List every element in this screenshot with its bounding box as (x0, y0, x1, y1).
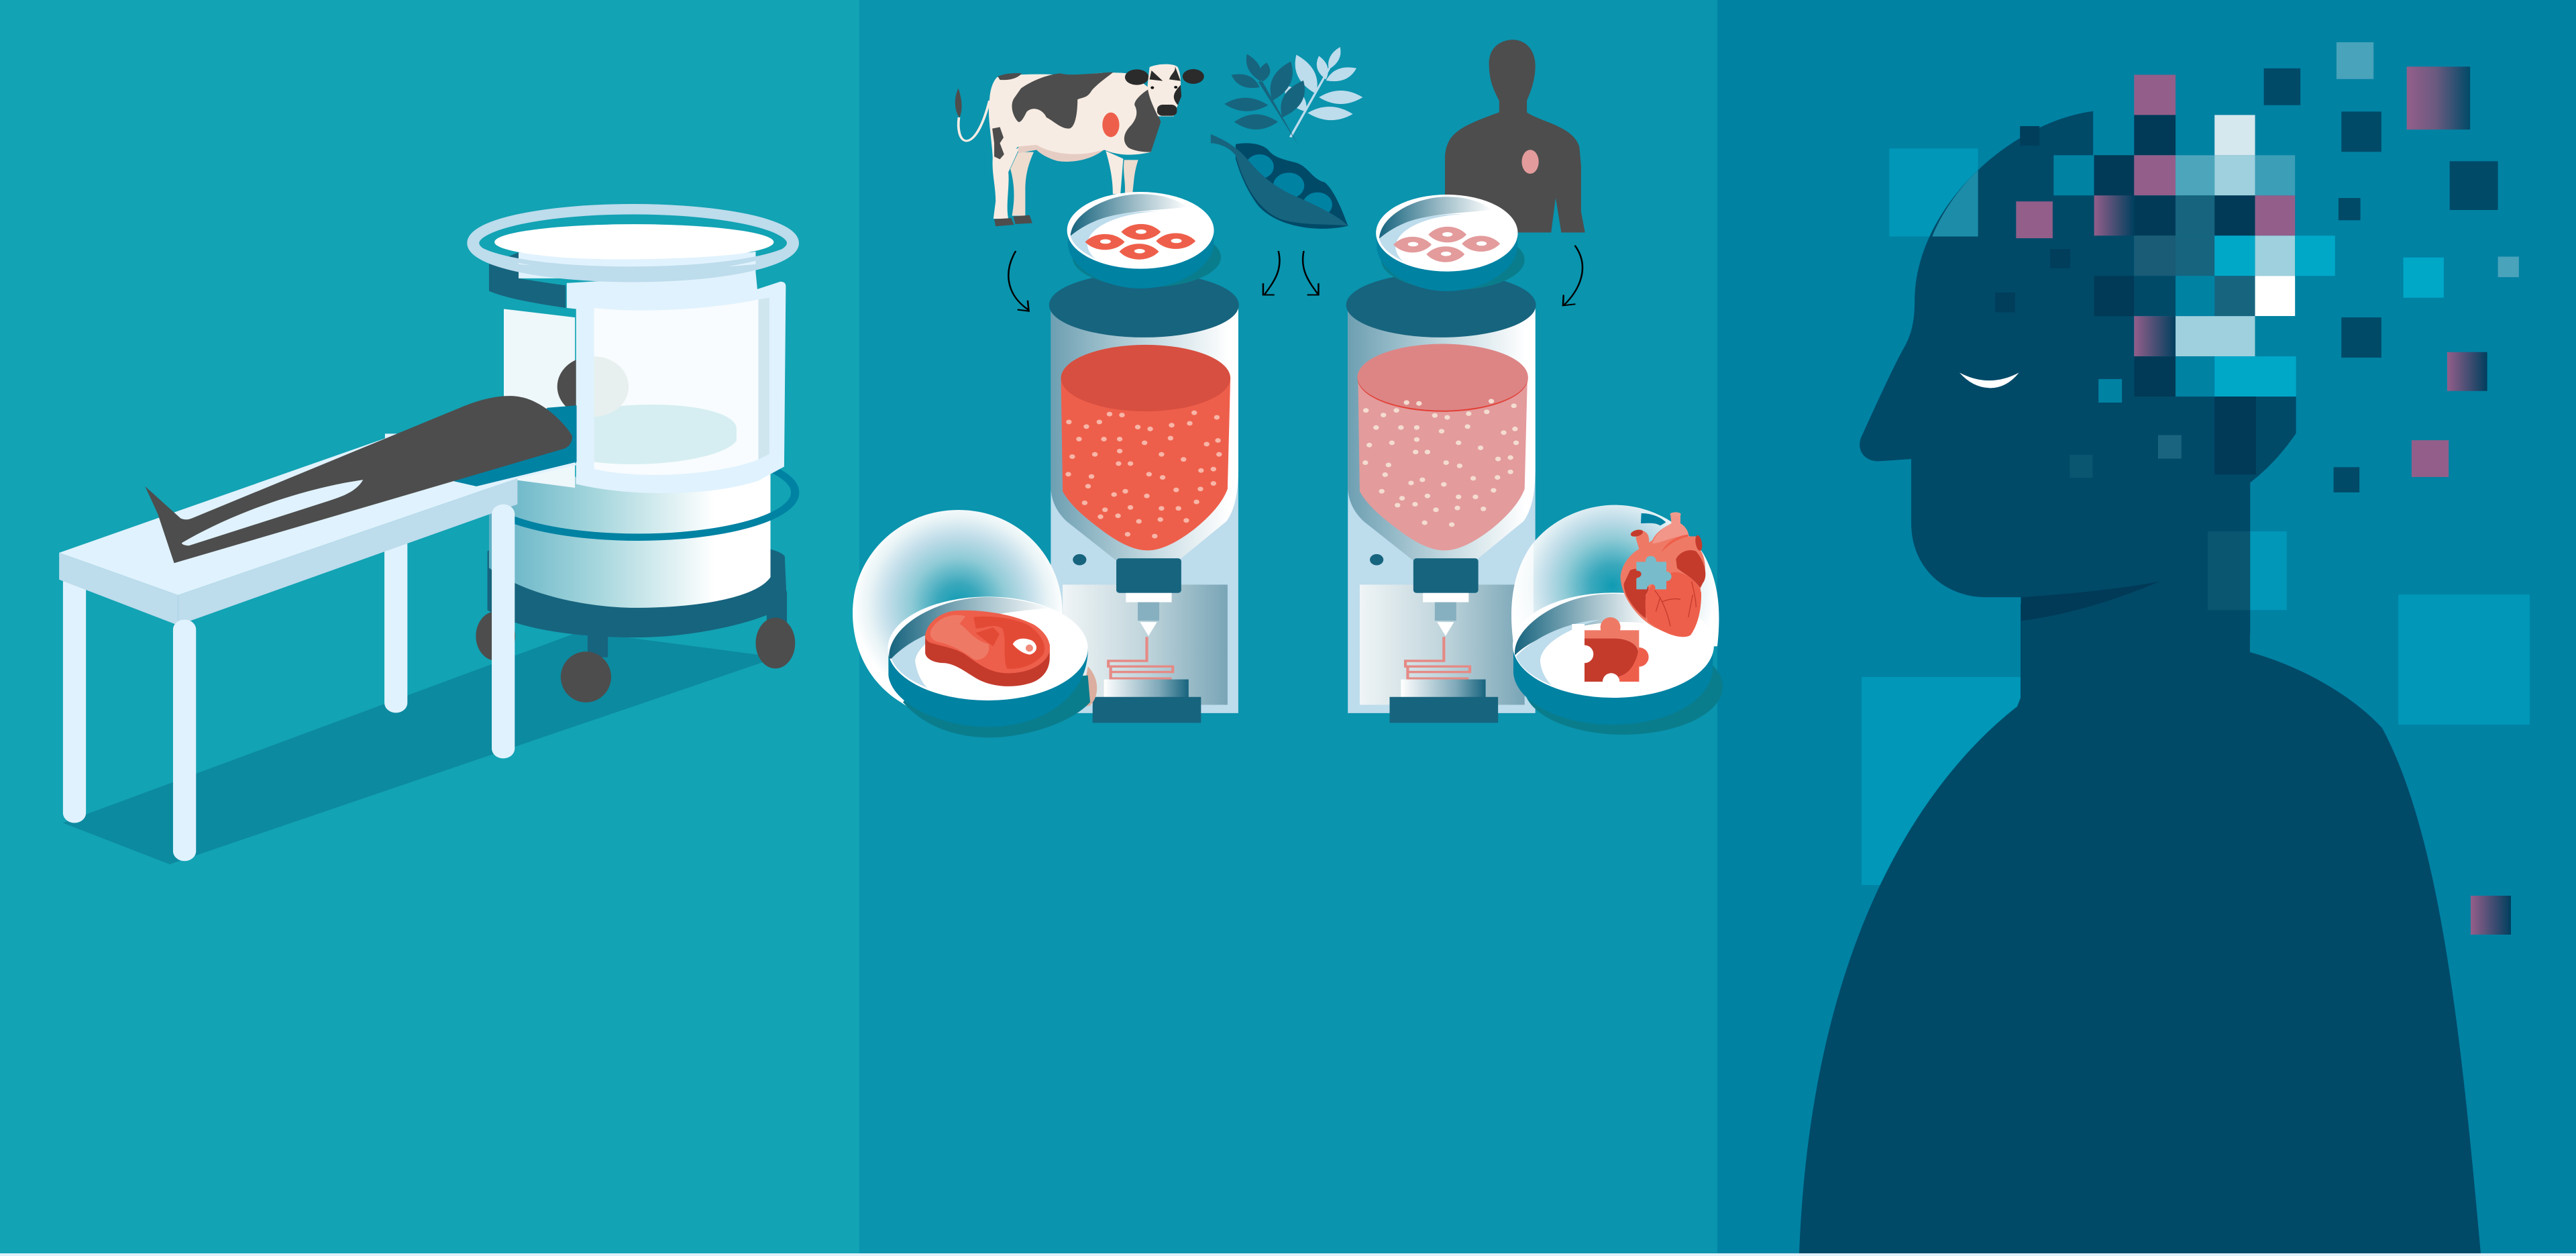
figure: body silhouette (1799, 604, 2481, 1253)
table top (59, 433, 576, 625)
floor shadow (63, 631, 777, 864)
square: lower right gradient pixel (2471, 896, 2511, 935)
scene: scanner and table (59, 209, 795, 864)
patient bed (451, 405, 577, 486)
icon: human silhouette (1445, 40, 1585, 233)
petri dish: human cells (1376, 195, 1525, 291)
patient head, behind glass (594, 356, 629, 417)
right reactor (1346, 272, 1536, 723)
dark branch (1224, 54, 1305, 144)
scanner frame (567, 272, 786, 493)
head silhouette (1860, 111, 2296, 635)
panel: middle background (859, 0, 1717, 1253)
chin shadow (2021, 582, 2160, 621)
scanner ring (481, 448, 795, 537)
figure: head with pixels (1860, 42, 2519, 635)
scanner lower cylinder (489, 474, 771, 608)
dish shadow (1524, 639, 1723, 735)
square: neck overlap (2208, 531, 2250, 610)
patient body (145, 396, 572, 563)
petri dish: cow cells (1067, 192, 1221, 289)
table front legs (173, 505, 515, 861)
dish shadow (1055, 666, 1097, 713)
patient head, dark part (557, 360, 576, 413)
icon: plants and pea pod (1211, 47, 1362, 229)
dish (1513, 644, 1713, 725)
scanner window (594, 299, 759, 475)
pixel grid (1995, 42, 2519, 492)
panel: right background (1717, 0, 2576, 1253)
scanner top ring (473, 209, 793, 277)
scanner left glass (504, 309, 575, 488)
inner disk (594, 405, 737, 464)
forehead overlap (1932, 170, 1978, 237)
arrows (1008, 246, 1582, 311)
dome with heart (1511, 505, 1723, 735)
heart (1621, 512, 1705, 637)
table rear legs (63, 535, 407, 823)
eye (1960, 372, 2019, 388)
light branch (1285, 47, 1362, 138)
icon: cow (955, 64, 1204, 226)
square: lower right (2398, 594, 2530, 725)
panel: left background (0, 0, 859, 1253)
scene: bioreactors (1008, 40, 1585, 723)
dome over reactor (1511, 542, 1534, 646)
square: neck outer (2250, 531, 2287, 610)
left reactor (1049, 272, 1239, 723)
dish (888, 649, 1088, 727)
puzzle piece (1572, 617, 1649, 690)
glass dome (853, 510, 1063, 711)
pea pod (1211, 134, 1348, 229)
dome with steak (853, 510, 1097, 737)
scanner wheels (476, 591, 795, 702)
scanner dark base (488, 548, 787, 637)
scanner collar (519, 252, 755, 278)
steak (925, 611, 1050, 686)
blue tube (1641, 513, 1666, 525)
glass dome (1511, 505, 1719, 646)
square: forehead (1889, 148, 1978, 237)
square: lower left behind body (1862, 677, 2029, 885)
